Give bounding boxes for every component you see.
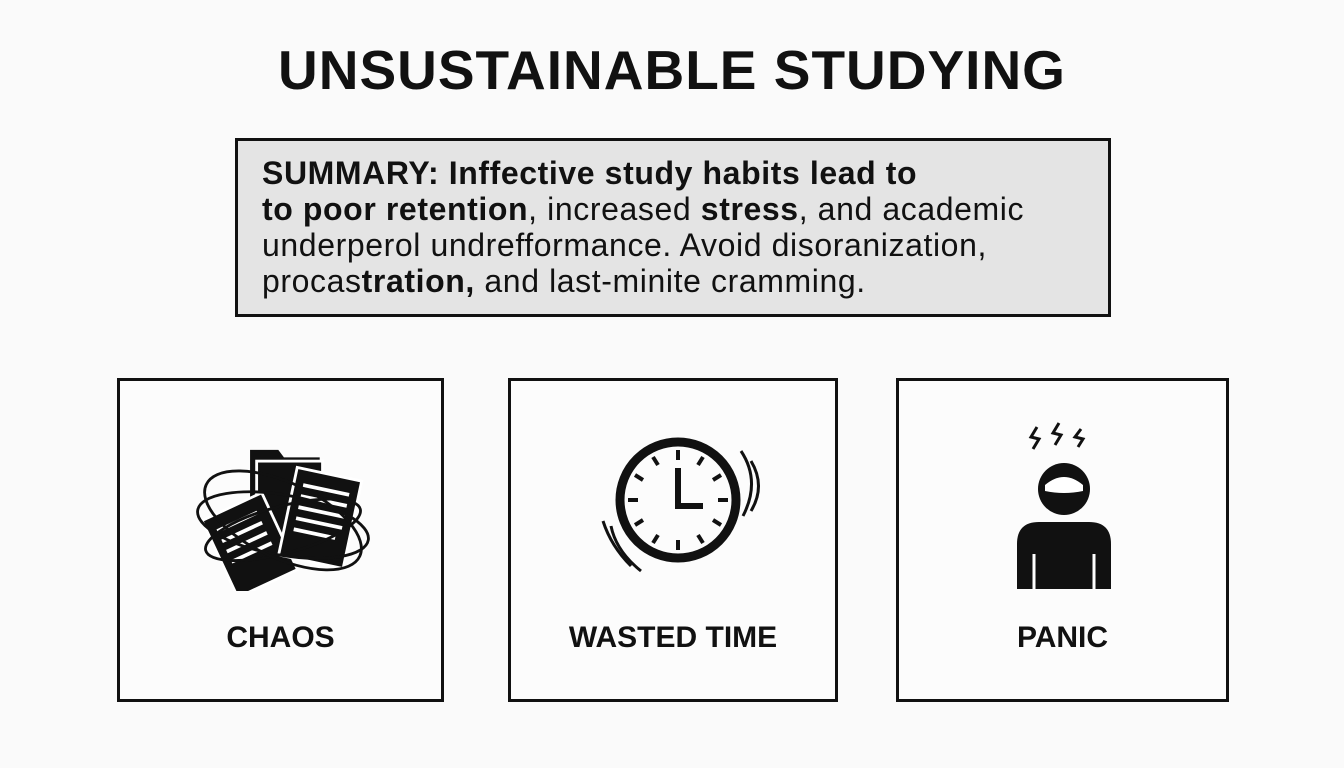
- summary box: to poor retention, increased stress, and academic: [262, 191, 1024, 227]
- label: wasted time: WASTED TIME: [569, 621, 777, 654]
- summary box: procastration, and last-minite cramming.: [262, 263, 866, 299]
- icon: clock: [602, 438, 760, 572]
- summary box: SUMMARY: Inffective study habits lead to: [262, 155, 917, 191]
- panel: chaos: [117, 378, 444, 702]
- panel: wasted time: [508, 378, 838, 702]
- label: panic: PANIC: [1017, 621, 1108, 654]
- icon: chaos papers: [196, 450, 370, 591]
- summary box: underperol undrefformance. Avoid disoranization,: [262, 227, 987, 263]
- title: UNSUSTAINABLE STUDYING: [278, 39, 1066, 101]
- panel: panic: [896, 378, 1229, 702]
- summary box: [235, 138, 1111, 317]
- icon: panicked person: [1017, 422, 1111, 589]
- label: chaos: CHAOS: [226, 621, 335, 654]
